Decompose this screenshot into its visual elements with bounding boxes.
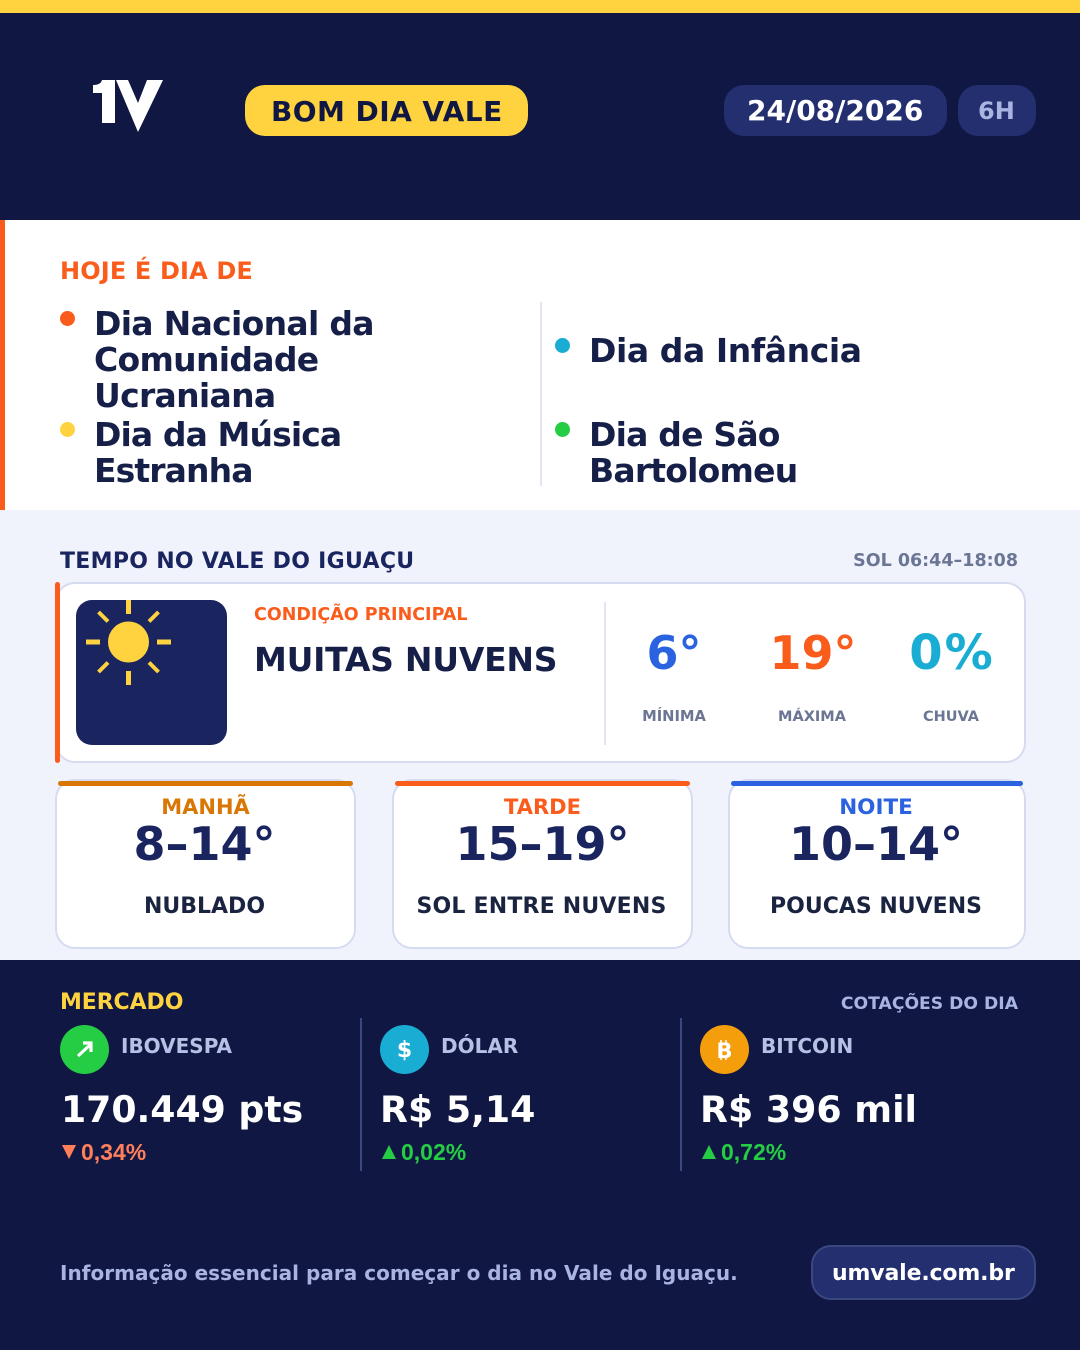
logo 1V	[93, 80, 163, 132]
stat: chuva	[909, 625, 995, 725]
panel: mercado	[0, 960, 1080, 1350]
stat: mínima: MÍNIMA	[642, 708, 706, 725]
stat: chuva: 0%	[909, 625, 995, 681]
range: 8–14°	[133, 817, 276, 871]
sun times: SOL 06:44–18:08	[853, 551, 1018, 571]
badge: Bom Dia Vale	[245, 85, 528, 136]
name: BITCOIN	[761, 1034, 853, 1058]
label: TARDE	[504, 795, 581, 819]
change: 0,02%	[401, 1139, 466, 1165]
value: R$ 396 mil	[700, 1088, 917, 1131]
divider	[604, 602, 606, 745]
condition: SOL ENTRE NUVENS	[416, 894, 667, 919]
condition label: CONDIÇÃO PRINCIPAL	[254, 605, 468, 625]
icon: bitcoin: B	[716, 1039, 733, 1063]
icon: up	[382, 1145, 396, 1159]
label: MANHÃ	[161, 795, 250, 819]
icon: dollar: $	[397, 1038, 412, 1063]
heading: TEMPO NO VALE DO IGUAÇU	[60, 549, 414, 574]
card: manhã	[55, 779, 356, 949]
hour pill	[958, 85, 1036, 136]
range: 10–14°	[789, 817, 963, 871]
icon: down	[62, 1145, 76, 1159]
stat: mínima	[642, 626, 706, 725]
condition: POUCAS NUVENS	[770, 894, 982, 919]
change: 0,72%	[721, 1139, 786, 1165]
stat: chuva: CHUVA	[923, 709, 979, 725]
item: comunidade ucraniana: Dia Nacional da	[94, 304, 374, 343]
accent	[395, 781, 690, 786]
ibovespa	[60, 1025, 303, 1165]
icon: sun	[76, 600, 227, 745]
orange card edge	[55, 582, 60, 763]
heading: MERCADO	[60, 990, 183, 1015]
item: infância: Dia da Infância	[589, 331, 862, 370]
item: música estranha: Dia da Música	[94, 415, 341, 454]
panel: hoje é dia de	[0, 220, 1080, 510]
footer tagline: Informação essencial para começar o dia no Vale do Iguaçu.	[60, 1261, 738, 1285]
heading: HOJE É DIA DE	[60, 257, 253, 285]
condition: MUITAS NUVENS	[254, 640, 557, 679]
item: são bartolomeu	[555, 415, 797, 490]
range: 15–19°	[455, 817, 630, 871]
item: comunidade ucraniana: Comunidade	[94, 340, 318, 379]
stat: mínima: 6°	[646, 626, 702, 680]
accent	[58, 781, 353, 786]
orange edge	[0, 220, 5, 510]
top accent bar	[0, 0, 1080, 13]
date pill: 24/08/2026	[747, 94, 923, 127]
item: comunidade ucraniana: Ucraniana	[94, 376, 275, 415]
icon: arrow	[60, 1025, 109, 1074]
item: são bartolomeu: Dia de São	[589, 415, 780, 454]
stat: máxima: 19°	[769, 626, 856, 680]
subheading: COTAÇÕES DO DIA	[841, 994, 1018, 1014]
panel: tempo	[0, 510, 1080, 960]
change: 0,34%	[81, 1139, 146, 1165]
name: IBOVESPA	[121, 1034, 232, 1058]
bitcoin	[700, 1025, 917, 1165]
header	[0, 13, 1080, 220]
name: DÓLAR	[441, 1034, 518, 1058]
icon: up	[702, 1145, 716, 1159]
dólar	[380, 1025, 535, 1165]
item: música estranha: Estranha	[94, 451, 253, 490]
badge: Bom Dia Vale: BOM DIA VALE	[271, 95, 503, 128]
stat: máxima: MÁXIMA	[778, 709, 846, 725]
value: R$ 5,14	[380, 1088, 535, 1131]
item: são bartolomeu: Bartolomeu	[589, 451, 797, 490]
card: noite	[728, 779, 1026, 949]
condition: NUBLADO	[144, 894, 265, 919]
divider	[540, 302, 542, 486]
site pill	[811, 1245, 1036, 1300]
accent	[731, 781, 1023, 786]
icon: dollar	[380, 1025, 429, 1074]
site pill: umvale.com.br	[832, 1261, 1015, 1286]
main weather card	[55, 582, 1026, 763]
label: NOITE	[839, 795, 913, 820]
divider	[360, 1018, 362, 1171]
item: comunidade ucraniana	[60, 304, 374, 415]
card: tarde	[392, 779, 693, 949]
item: música estranha	[60, 415, 341, 490]
divider	[680, 1018, 682, 1171]
stat: máxima	[769, 626, 856, 725]
date pill	[724, 85, 947, 136]
hour pill: 6H	[978, 97, 1015, 125]
value: 170.449 pts	[61, 1088, 303, 1131]
icon: bitcoin	[700, 1025, 749, 1074]
